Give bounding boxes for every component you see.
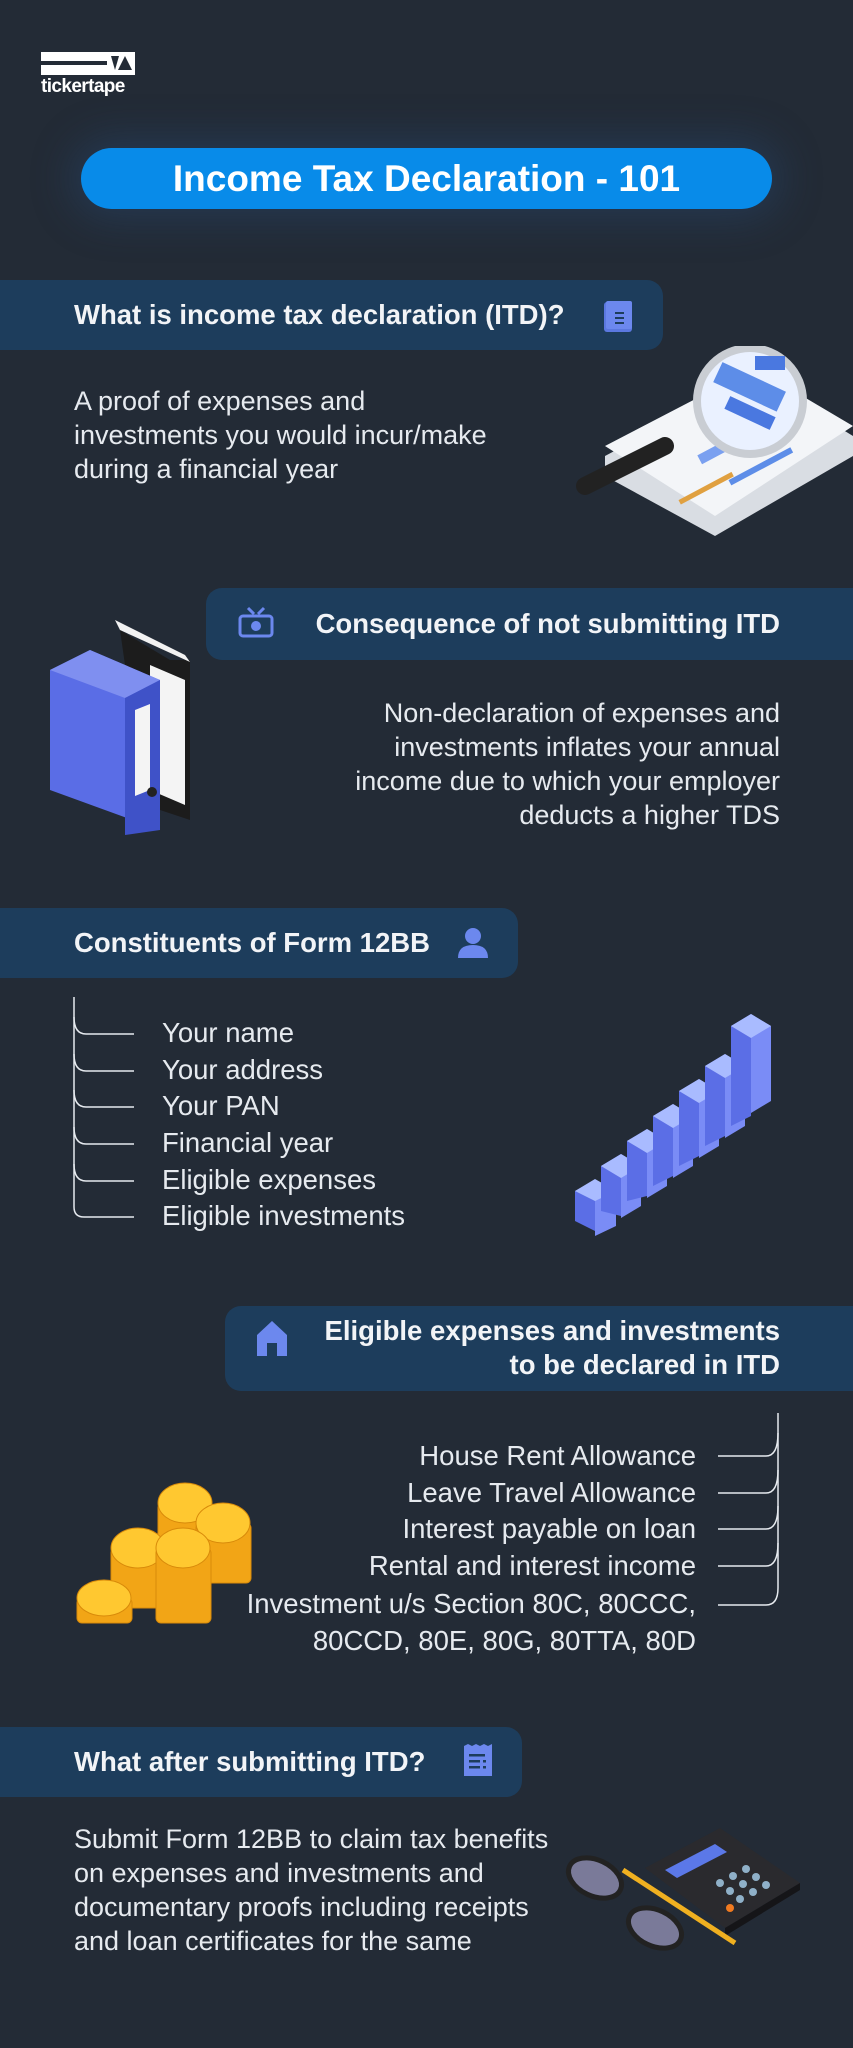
list: form 12BB constituents: Your PAN	[162, 1090, 280, 1121]
logo	[41, 52, 135, 97]
body text 2: investments inflates your annual	[394, 732, 780, 762]
title pill: Income Tax Declaration - 101	[173, 158, 680, 199]
section 2 header: Consequence of not submitting ITD	[316, 608, 780, 639]
list: form 12BB constituents: Your name	[162, 1017, 294, 1048]
illustration: bar chart	[575, 1014, 771, 1236]
illustration: calculator, pencil, glasses	[566, 1828, 800, 1950]
body text 2: deducts a higher TDS	[519, 800, 780, 830]
list: form 12BB constituents: Your address	[162, 1054, 323, 1085]
list: form 12BB constituents: Eligible investments	[162, 1200, 405, 1231]
section 3 header: Constituents of Form 12BB	[74, 927, 430, 958]
list: form 12BB constituents: Financial year	[162, 1127, 333, 1158]
icon: money	[238, 607, 274, 638]
list: eligible items: Leave Travel Allowance	[407, 1477, 696, 1508]
list: eligible items: Investment u/s Section 80C, 80CCC,	[247, 1588, 696, 1619]
body text 2: income due to which your employer	[355, 766, 780, 796]
section 2 header	[206, 588, 853, 660]
icon: document	[604, 301, 632, 332]
list: eligible items: Rental and interest income	[369, 1550, 696, 1581]
icon: person	[458, 928, 488, 958]
illustration: magnifier over documents	[576, 346, 853, 536]
body text 2	[355, 698, 780, 830]
list: eligible items: 80CCD, 80E, 80G, 80TTA, 80D	[313, 1625, 696, 1656]
icon: house	[257, 1321, 287, 1356]
illustration: binders	[50, 620, 190, 835]
section 4 header	[225, 1306, 853, 1391]
section 3 header	[0, 908, 518, 978]
body text 2: Non-declaration of expenses and	[384, 698, 780, 728]
section 4 header: to be declared in ITD	[510, 1349, 780, 1380]
body text 5: Submit Form 12BB to claim tax benefits	[74, 1824, 548, 1854]
section 5 header	[0, 1727, 522, 1797]
body text 1: A proof of expenses and	[74, 386, 365, 416]
body text 5: and loan certificates for the same	[74, 1926, 472, 1956]
illustration: coins	[76, 1482, 252, 1624]
body text 1: investments you would incur/make	[74, 420, 487, 450]
section 5 header: What after submitting ITD?	[74, 1746, 425, 1777]
list: eligible items	[247, 1413, 779, 1656]
body text 5: documentary proofs including receipts	[74, 1892, 529, 1922]
body text 1: during a financial year	[74, 454, 338, 484]
body text 1	[74, 386, 487, 484]
body text 5: on expenses and investments and	[74, 1858, 484, 1888]
icon: receipt	[464, 1744, 492, 1776]
logo: tickertape	[41, 76, 125, 97]
title pill	[81, 148, 772, 209]
list: form 12BB constituents: Eligible expenses	[162, 1164, 376, 1195]
list: eligible items: Interest payable on loan	[402, 1513, 696, 1544]
body text 5	[74, 1824, 548, 1956]
section 1 header: What is income tax declaration (ITD)?	[74, 299, 564, 330]
list: eligible items: House Rent Allowance	[419, 1440, 696, 1471]
list: form 12BB constituents	[73, 997, 405, 1231]
section 1 header	[0, 280, 663, 350]
section 4 header: Eligible expenses and investments	[325, 1315, 780, 1346]
